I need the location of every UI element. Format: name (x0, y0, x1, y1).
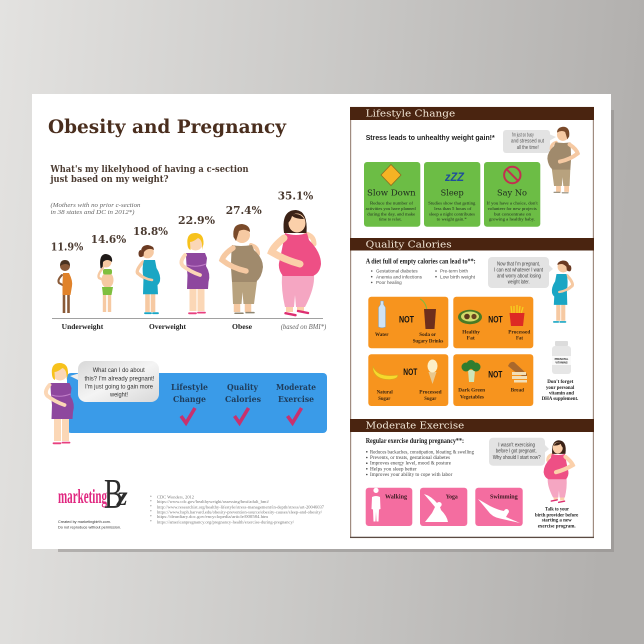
heading: quality calories (350, 238, 594, 250)
food card: natural vs processed sugar: Processed (419, 390, 442, 396)
card: sleep (424, 162, 480, 227)
risk list: Anemia and infections (376, 274, 423, 280)
food card: vegetables vs bread: Dark Green (458, 388, 485, 394)
subtitle question (50, 164, 249, 185)
percentages: 11.9% (51, 240, 83, 254)
figure: overweight 1 (137, 245, 160, 313)
provider note: starting a new (542, 518, 572, 524)
icon: bread (508, 362, 527, 382)
icon: soda (420, 299, 436, 329)
panel: call-to-action banner (67, 373, 327, 433)
benefits list: Helps you sleep better (370, 467, 417, 472)
benefits list: Improves your ability to cope with labor (370, 473, 453, 478)
panel: lifestyle change (350, 107, 594, 227)
heading: lifestyle change (350, 107, 594, 120)
icon: avocado (458, 310, 482, 324)
speech bubble: eat whatever: weight later. (507, 280, 530, 286)
speech bubble: eat whatever (488, 257, 553, 288)
risk list: Poor healing (376, 280, 402, 286)
exercise card: swimming: Swimming (490, 493, 519, 500)
percentages: 14.6% (91, 232, 126, 246)
footnotes: CDC Wonders, 2012 (157, 496, 194, 500)
footnotes: https://www.hsph.harvard.edu/obesity-prevention-source/obesity-causes/sleep-and-obesity/ (157, 510, 322, 514)
food card: natural vs processed sugar: Sugar (424, 396, 437, 402)
risk list (371, 269, 476, 286)
subtitle question: just based on my weight? (50, 174, 169, 185)
banner labels (171, 383, 316, 405)
card: say no: volunteer for new projects (488, 206, 537, 211)
speech bubble: not exercising: I wasn't exercising (498, 443, 535, 449)
footnotes: * (150, 505, 152, 509)
speech bubble: already pregnant: What can I do about (93, 367, 145, 374)
card: say no (484, 162, 540, 227)
figure: stressed woman (547, 127, 578, 193)
logo: marketing (58, 486, 107, 508)
provider note: exercise program. (538, 524, 576, 530)
figure: underweight 2 (98, 254, 114, 312)
benefits list: Reduces backaches, constipation, bloating & swelling (370, 450, 474, 455)
footnotes: http://www.researchist.org/healthy-lifestyle/stress-management/in-depth/stress/art-20046037 (157, 505, 324, 509)
food card: healthy vs processed fat: Fat (467, 336, 475, 342)
speech bubble: already pregnant: this? I'm already pregnant! (84, 376, 155, 382)
footnotes: * (150, 515, 152, 519)
food card: healthy vs processed fat: NOT (488, 314, 503, 325)
footnotes: * (150, 500, 152, 504)
card: say no: growing a healthy baby. (489, 217, 535, 222)
banner labels: Calories (225, 395, 261, 405)
speech bubble: busy: all the time! (517, 145, 539, 151)
figure: obese 1 (222, 224, 263, 313)
speech bubble: not exercising: before I got pregnant. (496, 449, 537, 455)
card: slow down: during the day, and make (367, 211, 415, 217)
weight category labels: Underweight (62, 324, 104, 331)
icon: vitamin bottle: VITAMINS (555, 360, 568, 364)
speech bubble: busy: and stressed out (511, 139, 545, 145)
card: slow down: Reduce the number of (370, 200, 414, 205)
food card: healthy vs processed fat (453, 297, 533, 348)
icon: banana (373, 366, 398, 380)
food card: water vs soda: Soda or (419, 332, 437, 338)
vitamin note: Don't forget (547, 379, 573, 385)
figure: woman in pink (544, 440, 573, 502)
speech bubble: already pregnant: weight! (109, 392, 128, 398)
weight category labels: Obese (232, 324, 252, 331)
weight category labels (62, 324, 327, 331)
card: say no: If you have a choice, don't (487, 200, 539, 206)
heading: moderate exercise (350, 419, 594, 432)
icon: vitamin bottle: PRENATAL (555, 357, 569, 361)
food card: water vs soda (368, 297, 448, 348)
figure: pregnant woman in teal (552, 260, 572, 322)
panel: quality calories (350, 238, 594, 406)
provider note: Talk to your (545, 507, 570, 513)
card: sleep: sleep a night contributes (429, 211, 475, 216)
card: say no: but concentrate on (494, 211, 532, 216)
card: sleep: less than 5 hours of (434, 206, 472, 211)
risk list: Low birth weight (440, 274, 476, 280)
weight category labels: Overweight (149, 324, 187, 331)
banner labels: Exercise (278, 395, 314, 405)
percentages: 22.9% (178, 213, 215, 227)
card: slow down: Slow Down (367, 189, 416, 198)
icon: fries (510, 305, 524, 326)
food card: water vs soda: Sugary Drinks (413, 338, 443, 344)
food card: water vs soda: Water (375, 332, 389, 338)
food card: healthy vs processed fat: Processed (508, 329, 530, 335)
speech bubble: not exercising (489, 438, 549, 466)
icon: vitamin bottle (552, 341, 571, 374)
vitamin note: vitamin and (549, 390, 574, 396)
food card: natural vs processed sugar: Sugar (378, 396, 391, 402)
card: slow down (364, 162, 420, 227)
speech bubble: eat whatever: Now that I'm pregnant, (497, 262, 540, 268)
food card: water vs soda: NOT (399, 314, 414, 325)
figure: woman with speech bubble (46, 363, 74, 443)
vitamin note: DHA supplement. (542, 396, 579, 402)
percentages: 35.1% (278, 189, 313, 203)
credit: Created by marketingbirth.com. (58, 520, 111, 524)
logo (58, 472, 128, 518)
speech bubble: busy: I'm just so busy (512, 133, 534, 139)
exercise card: walking: Walking (385, 493, 408, 500)
footnotes: https://www.cdc.gov/healthyweight/assessing/bmi/adult_bmi/ (157, 500, 269, 504)
speech bubble: eat whatever: and worry about losing (497, 274, 541, 280)
food card: natural vs processed sugar: Natural (377, 390, 393, 396)
baseline axis (52, 317, 323, 320)
vitamin note (542, 379, 579, 402)
figure: underweight 1 (58, 260, 72, 313)
provider note: birth provider before (535, 512, 579, 518)
exercise statement: Regular exercise during pregnancy**: (366, 437, 464, 445)
card: sleep: Studies show that getting (428, 200, 476, 205)
title: Obesity and Pregnancy (48, 116, 287, 138)
benefits list (366, 450, 474, 478)
icon: broccoli (462, 360, 480, 382)
vitamin note: your personal (546, 385, 575, 391)
food card: healthy vs processed fat: Healthy (462, 329, 480, 335)
paper sheet (32, 94, 611, 549)
banner labels: Change (173, 395, 206, 405)
speech bubble: eat whatever: I can eat whatever I want (494, 268, 543, 274)
card: slow down: activities you have planned (366, 206, 417, 211)
exercise card: yoga: Yoga (446, 493, 458, 500)
heading: moderate exercise: Moderate Exercise (366, 420, 465, 432)
card: sleep: Sleep (441, 189, 464, 198)
data note: (Mothers with no prior c-section (50, 202, 140, 209)
speech bubble: already pregnant (70, 361, 159, 402)
credit (58, 520, 121, 530)
weight category labels: (based on BMI*) (281, 324, 327, 331)
figure: obese 2 (272, 210, 321, 315)
speech bubble: busy (503, 130, 556, 153)
paper shadow (58, 110, 614, 552)
footnotes: https://deardiary.doc.gov/encyclopedia/article/000584.htm (157, 515, 268, 519)
food card: natural vs processed sugar: NOT (403, 367, 417, 378)
provider note (535, 507, 579, 530)
food card: vegetables vs bread: Vegetables (460, 394, 484, 400)
benefits list: Improves energy level, mood & posture (370, 462, 452, 467)
food card: vegetables vs bread (453, 354, 533, 406)
footnotes: * (150, 510, 152, 514)
panel frame: right column (350, 108, 594, 538)
subtitle question: What's my likelyhood of having a c-section (50, 164, 249, 175)
logo: z (116, 481, 128, 511)
banner labels: Lifestyle (171, 383, 208, 393)
banner labels: Moderate (276, 383, 316, 393)
check marks (181, 408, 302, 423)
icon: ice cream (428, 360, 438, 384)
speech bubble: already pregnant: I'm just going to gain more (85, 384, 153, 390)
banner labels: Quality (227, 383, 259, 393)
percentages: 18.8% (133, 224, 168, 238)
percentages (51, 189, 313, 254)
benefits list: Prevents, or treats, gestational diabetes (370, 456, 450, 461)
exercise card: swimming (475, 488, 523, 526)
card: say no: Say No (497, 189, 527, 198)
card: sleep: to weight gain.* (437, 217, 467, 222)
food card: healthy vs processed fat: Fat (516, 336, 523, 342)
food card: natural vs processed sugar (368, 354, 448, 406)
exercise card: yoga (420, 488, 467, 526)
food card: vegetables vs bread: Bread (511, 388, 524, 394)
footnotes: https://americanpregnancy.org/pregnancy-health/exercise-during-pregnancy/ (157, 520, 294, 524)
stress statement: Stress leads to unhealthy weight gain!* (366, 133, 495, 142)
figure: overweight 2 (181, 233, 209, 313)
food card: vegetables vs bread: NOT (488, 369, 502, 380)
risk list: Pre-term birth (440, 269, 468, 275)
footnotes (150, 496, 324, 524)
speech bubble: not exercising: Why should I start now? (493, 455, 541, 461)
credit: Do not reproduce without permission. (58, 526, 121, 530)
footnotes: * (150, 496, 152, 500)
card: sleep: zZZ (444, 170, 465, 184)
percentages: 27.4% (226, 203, 262, 217)
heading: lifestyle change: Lifestyle Change (366, 109, 456, 120)
card: slow down: time to relax. (379, 217, 402, 222)
logo: B (104, 472, 123, 518)
footnotes: * (150, 520, 152, 524)
icon: water bottle (378, 301, 386, 328)
diet statement: A diet full of empty calories can lead to**: (366, 258, 476, 266)
exercise card: walking (366, 488, 412, 526)
panel: moderate exercise (350, 419, 594, 530)
data note: in 38 states and DC in 2012*) (50, 209, 134, 216)
data note (50, 202, 140, 216)
heading: quality calories: Quality Calories (366, 239, 452, 250)
risk list: Gestational diabetes (376, 269, 418, 275)
